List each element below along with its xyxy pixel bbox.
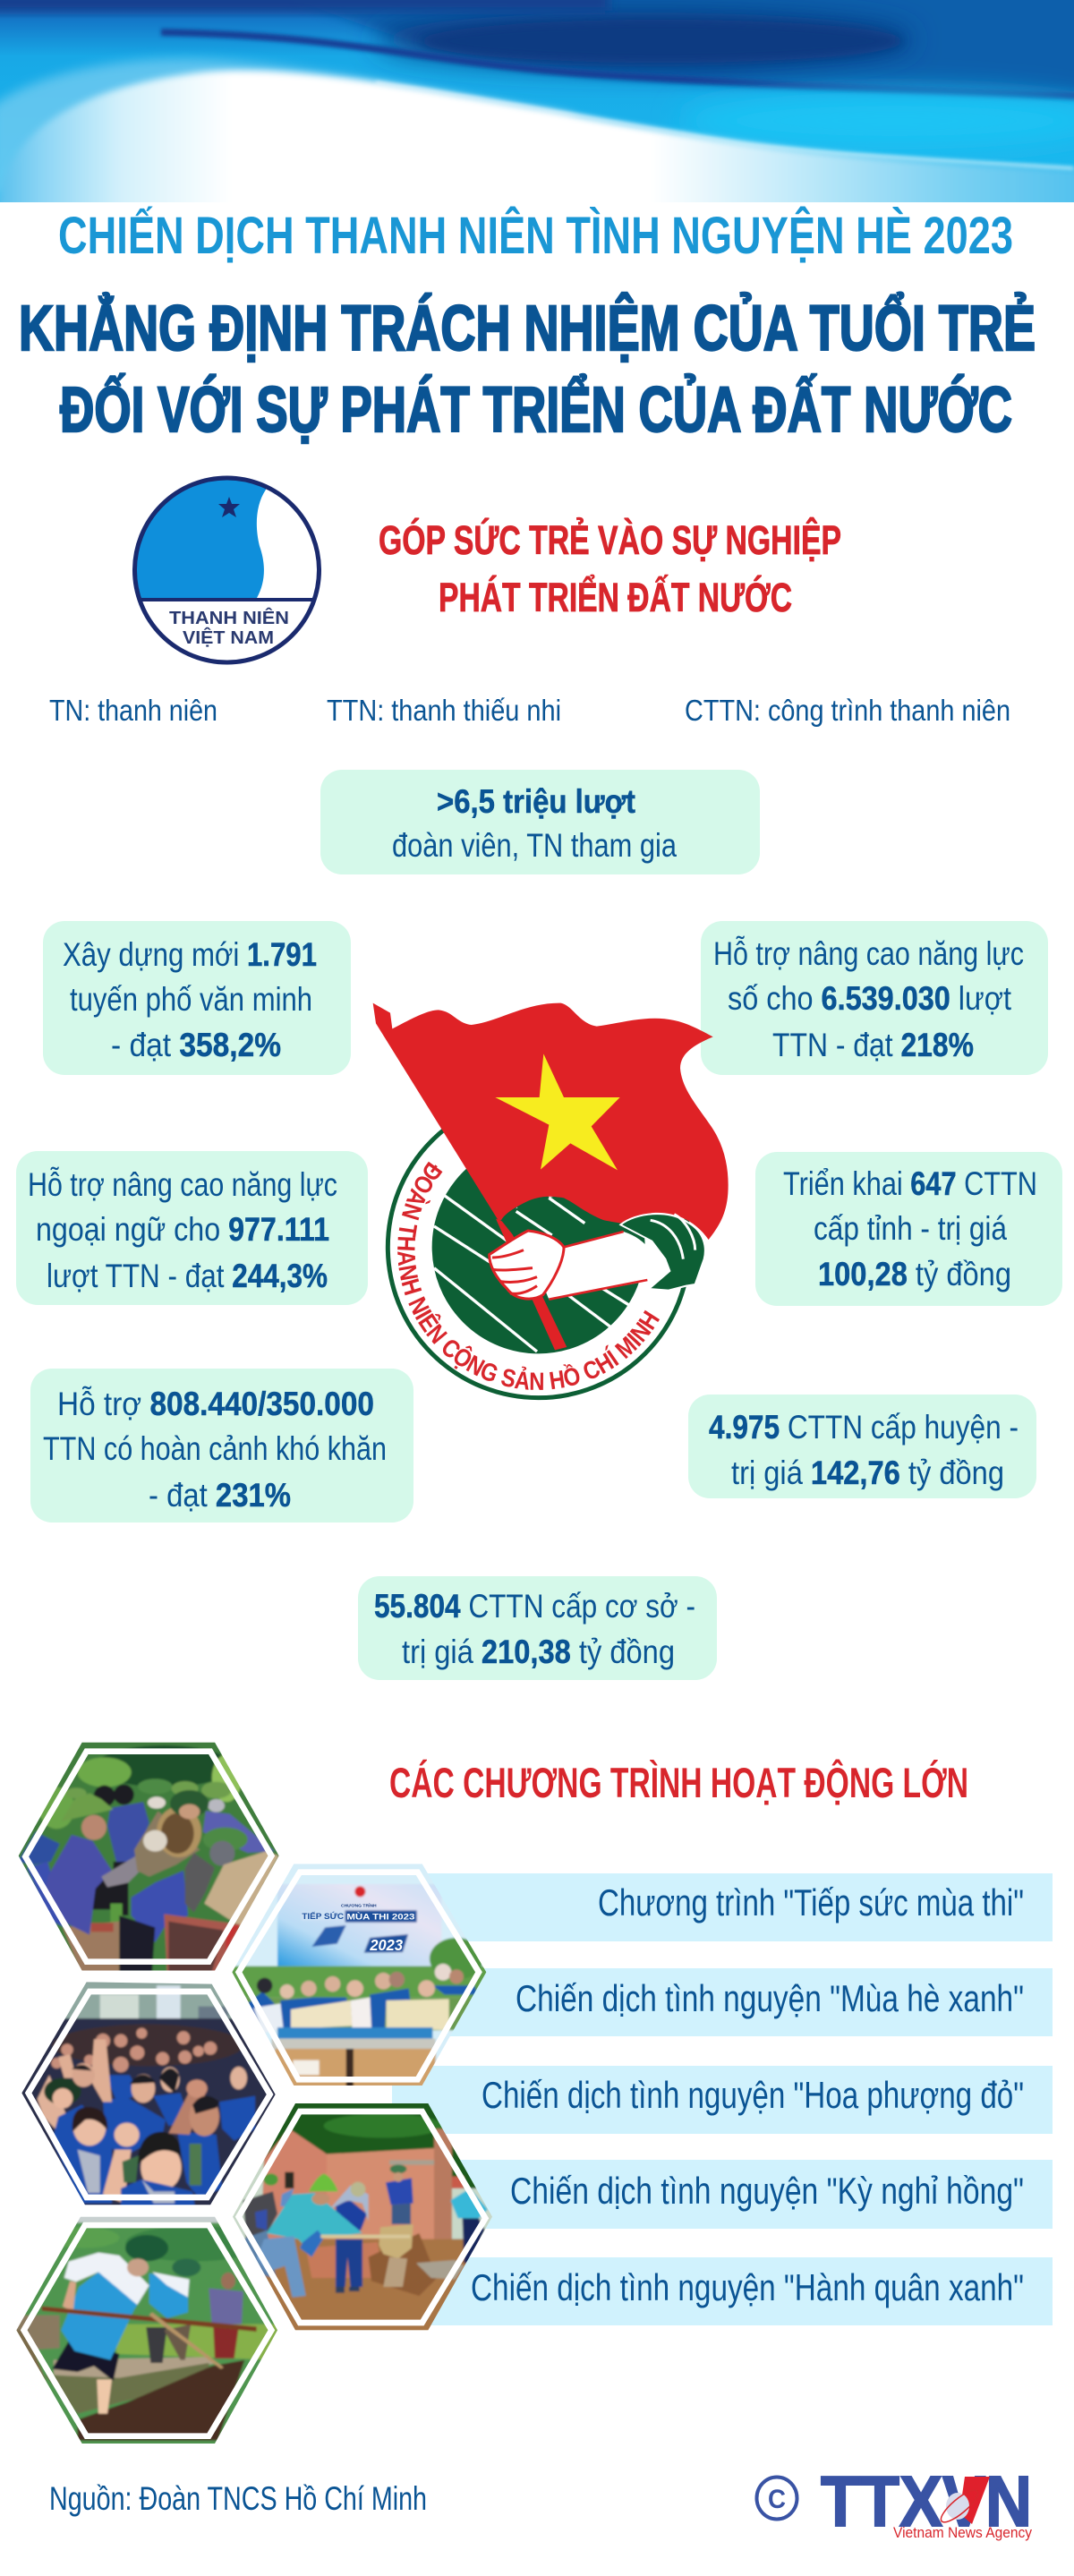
card: hoàn cảnh khó khăn: TTN có hoàn cảnh khó khăn (43, 1430, 387, 1467)
programme bar: Kỳ nghỉ hồng (428, 2160, 1053, 2229)
card: tuyến phố văn minh: - đạt 358,2% (111, 1027, 281, 1063)
programme bar: Tiếp sức mùa thi (428, 1873, 1053, 1941)
card: CTTN cấp cơ sở: 55.804 CTTN cấp cơ sở - (374, 1588, 695, 1625)
logo: Thanh Niên Việt Nam: THANH NIÊN (169, 607, 289, 628)
TTXVN logo: C (768, 2485, 786, 2514)
TTXVN logo: Vietnam News Agency (893, 2524, 1032, 2541)
emblem: Đoàn TNCS Hồ Chí Minh: ĐOÀN THANH NIÊN CỘNG SẢN HỒ CHÍ MINH (397, 1162, 660, 1390)
programme bar: Mùa hè xanh (428, 1968, 1053, 2036)
card: participants: >6,5 triệu lượt (437, 783, 635, 820)
card: năng lực số: số cho 6.539.030 lượt (728, 980, 1012, 1017)
legend of abbreviations: TTN: thanh thiếu nhi (327, 694, 561, 727)
legend of abbreviations: CTTN: công trình thanh niên (685, 694, 1010, 727)
heading: góp sức trẻ: PHÁT TRIỂN ĐẤT NƯỚC (439, 575, 792, 620)
heading: góp sức trẻ: GÓP SỨC TRẺ VÀO SỰ NGHIỆP (379, 517, 841, 563)
card: CTTN cấp tỉnh (755, 1152, 1062, 1306)
card: CTTN cấp huyện: 4.975 CTTN cấp huyện - (709, 1409, 1019, 1446)
card: CTTN cấp tỉnh: 100,28 tỷ đồng (818, 1256, 1011, 1292)
card: CTTN cấp tỉnh: cấp tỉnh - trị giá (814, 1210, 1007, 1247)
card: CTTN cấp huyện: trị giá 142,76 tỷ đồng (731, 1454, 1004, 1491)
card: tuyến phố văn minh: tuyến phố văn minh (70, 981, 312, 1018)
card: CTTN cấp huyện (688, 1395, 1036, 1498)
card: participants (320, 770, 760, 874)
logo: Thanh Niên Việt Nam (132, 476, 321, 664)
card: tuyến phố văn minh (43, 921, 351, 1075)
header wave banner (0, 0, 1074, 215)
card: CTTN cấp cơ sở: trị giá 210,38 tỷ đồng (402, 1633, 675, 1670)
heading: góp sức trẻ (379, 517, 841, 620)
card: năng lực số (701, 921, 1048, 1075)
photo hexagon: cheering crowd (21, 1982, 276, 2205)
photo hexagon: Tiếp sức mùa thi banner: MÙA THI 2023 (346, 1911, 414, 1921)
photo hexagon: building brick wall (228, 2099, 497, 2336)
card: tuyến phố văn minh: Xây dựng mới 1.791 (63, 936, 317, 973)
legend of abbreviations (49, 694, 1010, 727)
programme bar: Hành quân xanh (428, 2257, 1053, 2325)
photo hexagon: volunteers carrying earth (18, 1742, 279, 1971)
TTXVN logo: TTXVN (821, 2461, 1032, 2541)
logo: Thanh Niên Việt Nam: VIỆT NAM (183, 627, 274, 648)
main title (19, 293, 1036, 446)
programme bar: Hoa phượng đỏ (392, 2066, 1053, 2134)
legend of abbreviations: TN: thanh niên (49, 694, 217, 727)
photo hexagon: Tiếp sức mùa thi banner (232, 1864, 487, 2086)
source note: Nguồn: Đoàn TNCS Hồ Chí Minh (49, 2480, 427, 2517)
emblem: Đoàn TNCS Hồ Chí Minh (372, 1002, 729, 1400)
photo hexagon: Tiếp sức mùa thi banner: TIẾP SỨC (302, 1911, 344, 1921)
photo hexagon: digging soil (16, 2216, 277, 2444)
card: CTTN cấp cơ sở (358, 1576, 717, 1680)
card: năng lực ngoại ngữ: lượt TTN - đạt 244,3% (47, 1258, 328, 1294)
card: năng lực ngoại ngữ: ngoại ngữ cho 977.111 (36, 1211, 329, 1248)
card: hoàn cảnh khó khăn (30, 1369, 413, 1523)
card: năng lực ngoại ngữ (16, 1151, 368, 1305)
card: hoàn cảnh khó khăn: Hỗ trợ 808.440/350.000 (57, 1386, 374, 1422)
photo hexagon: Tiếp sức mùa thi banner: 2023 (369, 1936, 403, 1954)
card: năng lực ngoại ngữ: Hỗ trợ nâng cao năng lực (28, 1166, 337, 1203)
card: năng lực số: TTN - đạt 218% (772, 1027, 974, 1063)
card: participants: đoàn viên, TN tham gia (392, 827, 677, 864)
photo hexagon: Tiếp sức mùa thi banner: CHƯƠNG TRÌNH (341, 1902, 377, 1909)
card: hoàn cảnh khó khăn: - đạt 231% (149, 1477, 291, 1514)
card: CTTN cấp tỉnh: Triển khai 647 CTTN (783, 1165, 1037, 1202)
